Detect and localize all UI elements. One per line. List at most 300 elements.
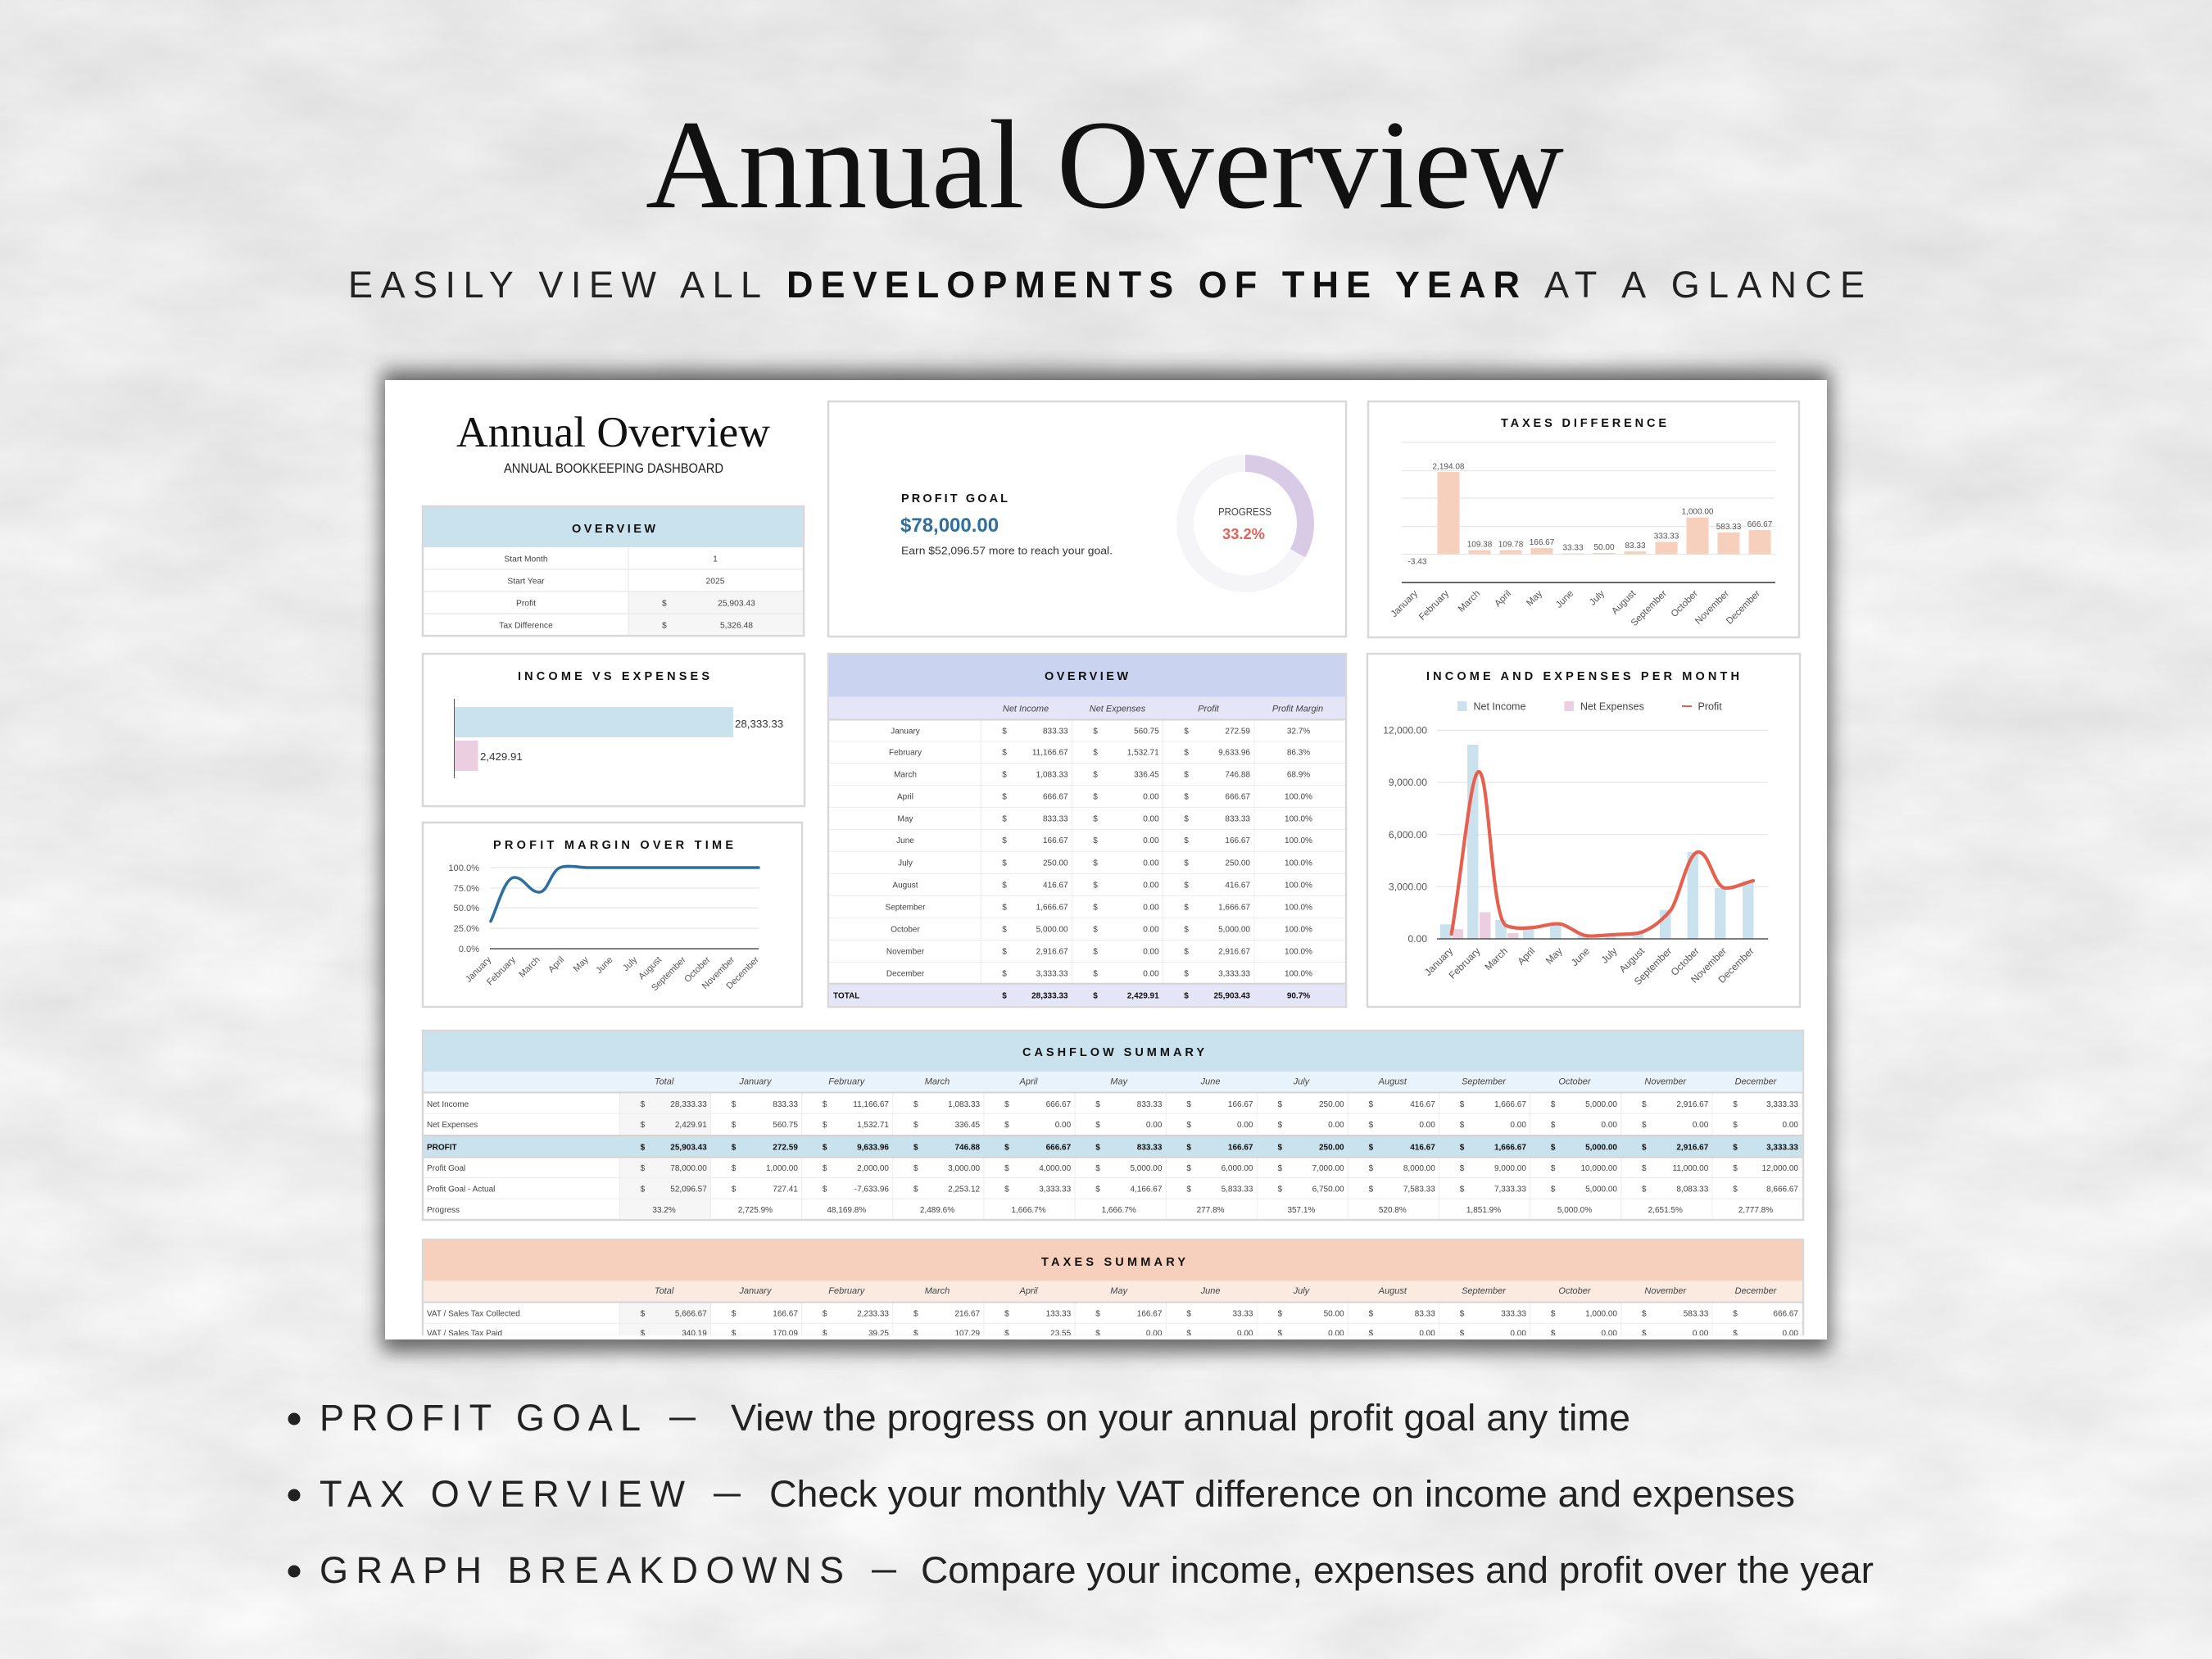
panel: monthly overview table: 336.45: [1134, 771, 1159, 780]
bar: income: [455, 707, 733, 737]
panel: profit margin over time: June: [594, 955, 615, 976]
row: net income: 11,166.67: [853, 1100, 889, 1109]
panel: monthly overview table: 1,083.33: [1036, 771, 1068, 780]
row: profit goal: 3,000.00: [948, 1164, 981, 1173]
panel: monthly overview table: [828, 654, 1346, 1007]
panel: monthly overview table: 0.00: [1143, 903, 1159, 912]
row: net expenses: 0.00: [1419, 1121, 1435, 1130]
panel: monthly overview table: $$$: [1002, 903, 1189, 912]
panel: taxes difference: 33.33: [1562, 544, 1584, 552]
panel: monthly overview table: October: [891, 926, 920, 935]
panel: monthly overview table: 0.00: [1143, 969, 1159, 978]
row: VAT collected: 166.67: [773, 1309, 798, 1319]
panel: taxes summary: July: [1293, 1286, 1311, 1296]
row: profit: 166.67: [1228, 1144, 1253, 1152]
panel: taxes summary: TAXES SUMMARY: [1041, 1256, 1185, 1269]
panel: monthly overview table: Profit: [1198, 705, 1220, 714]
panel: profit margin over time: September: [650, 954, 688, 993]
panel: cashflow summary: July: [1293, 1077, 1311, 1086]
row: net income: 1,083.33: [948, 1100, 981, 1109]
panel: monthly overview table: 166.67: [1225, 836, 1250, 845]
row: net expenses: 0.00: [1328, 1121, 1344, 1130]
panel: income and expenses per month: November: [1688, 945, 1729, 986]
panel: monthly overview table: 833.33: [1043, 814, 1068, 823]
row: progress: [427, 1206, 1773, 1215]
row: net expenses: 0.00: [1510, 1121, 1526, 1130]
panel: monthly overview table: 2,429.91: [1127, 991, 1159, 1000]
row: net income: 833.33: [773, 1100, 798, 1109]
panel: monthly overview table: 666.67: [1043, 793, 1068, 801]
panel: income and expenses per month: October: [1669, 945, 1702, 978]
panel: monthly overview table: 0.00: [1143, 926, 1159, 935]
panel: overview summary: 5,326.48: [720, 621, 753, 631]
panel: profit margin over time: August: [637, 955, 664, 981]
row: VAT paid (cut off): 340.19: [682, 1329, 707, 1339]
panel: monthly overview table: 100.0%: [1285, 859, 1312, 868]
row: net expenses: 2,429.91: [675, 1121, 707, 1130]
row: VAT paid (cut off): $$$$$$$$$$$$$: [641, 1329, 1738, 1339]
row: progress: 48,169.8%: [827, 1206, 866, 1215]
row: net expenses: 0.00: [1602, 1121, 1617, 1130]
panel: taxes difference: 583.33: [1716, 523, 1742, 532]
panel: monthly overview table: January: [891, 727, 920, 736]
row: net income: 666.67: [1046, 1100, 1072, 1109]
row: profit goal minus actual: 8,083.33: [1676, 1185, 1709, 1194]
panel: income and expenses per month: July: [1599, 945, 1620, 966]
panel: taxes summary: June: [1200, 1286, 1221, 1296]
row: VAT collected: 216.67: [955, 1309, 981, 1319]
row: net income: 5,000.00: [1585, 1100, 1617, 1109]
panel: monthly overview table: 86.3%: [1287, 748, 1310, 757]
row: VAT collected: 2,233.33: [857, 1309, 889, 1319]
panel: cashflow summary: January: [738, 1077, 773, 1086]
panel: taxes summary: Total: [655, 1286, 674, 1296]
panel: taxes difference: 2,194.08: [1433, 462, 1465, 472]
panel: monthly overview table: 100.0%: [1285, 926, 1312, 935]
subtitle: EASILY VIEW ALL: [348, 264, 761, 306]
row: VAT collected: VAT / Sales Tax Collected: [427, 1309, 520, 1319]
panel: profit goal: $78,000.00: [900, 514, 999, 537]
panel: monthly overview table: OVERVIEW: [1045, 670, 1128, 683]
row: VAT paid (cut off): 0.00: [1237, 1329, 1253, 1339]
panel: monthly overview table: 0.00: [1143, 793, 1159, 801]
row: VAT collected: 666.67: [1773, 1309, 1798, 1319]
panel: taxes summary: September: [1462, 1286, 1507, 1296]
row: profit goal: 5,000.00: [1130, 1164, 1163, 1173]
row: profit: 833.33: [1137, 1144, 1163, 1152]
panel: monthly overview table: $$$: [1002, 727, 1189, 736]
panel: monthly overview table: 5,000.00: [1036, 926, 1068, 935]
panel: income vs expenses: 2,429.91: [480, 750, 523, 763]
panel: profit margin over time: PROFIT MARGIN OVER TIME: [493, 839, 733, 852]
row: profit goal minus actual: Profit Goal - Actual: [427, 1185, 495, 1194]
row: profit: 9,633.96: [857, 1144, 889, 1152]
panel: profit margin over time: [423, 823, 802, 1007]
panel: monthly overview table: 0.00: [1143, 814, 1159, 823]
panel: cashflow summary: [423, 1031, 1803, 1220]
panel: monthly overview table: 833.33: [1225, 814, 1250, 823]
row: VAT collected: 33.33: [1232, 1309, 1253, 1319]
row: net expenses: 0.00: [1693, 1121, 1709, 1130]
panel: taxes summary: February: [828, 1286, 866, 1296]
row: VAT collected: 83.33: [1415, 1309, 1435, 1319]
row: profit: 5,000.00: [1585, 1144, 1617, 1152]
panel: taxes summary: January: [738, 1286, 773, 1296]
panel: taxes difference: April: [1493, 589, 1513, 609]
row: progress: 1,666.7%: [1102, 1206, 1136, 1215]
panel: monthly overview table: 250.00: [1225, 859, 1250, 868]
panel: taxes summary: April: [1018, 1286, 1038, 1296]
panel: monthly overview table: March: [894, 771, 917, 780]
row: progress: 1,851.9%: [1466, 1206, 1501, 1215]
panel: overview summary: 2025: [706, 577, 725, 587]
row: net income: $$$$$$$$$$$$$: [641, 1100, 1738, 1109]
panel: taxes difference: 109.38: [1467, 541, 1493, 549]
row: profit goal: 78,000.00: [670, 1164, 707, 1173]
panel: taxes difference: March: [1457, 589, 1482, 614]
panel: monthly overview table: 833.33: [1043, 727, 1068, 736]
row: VAT collected: 50.00: [1324, 1309, 1344, 1319]
panel: overview summary: OVERVIEW: [572, 523, 655, 536]
row: net income: 2,916.67: [1676, 1100, 1709, 1109]
panel: profit margin over time: November: [700, 954, 737, 991]
panel: monthly overview table: Profit Margin: [1272, 705, 1323, 714]
row: profit goal: 7,000.00: [1312, 1164, 1344, 1173]
panel: taxes difference: 666.67: [1747, 520, 1773, 529]
panel: income and expenses per month: September: [1632, 945, 1674, 987]
panel: monthly overview table: 746.88: [1225, 771, 1250, 780]
panel: monthly overview table: 28,333.33: [1031, 991, 1068, 1000]
bullet: profit goal: PROFIT GOAL: [320, 1397, 641, 1439]
panel: monthly overview table: 100.0%: [1285, 882, 1312, 890]
subtitle: AT A GLANCE: [1544, 264, 1865, 306]
panel: monthly overview table: Net Income: [1003, 705, 1049, 714]
panel: taxes difference: 333.33: [1654, 533, 1679, 541]
panel: monthly overview table: Net Expenses: [1090, 705, 1146, 714]
panel: monthly overview table: $$$: [1002, 926, 1189, 935]
panel: profit margin over time: December: [724, 954, 761, 991]
panel: monthly overview table: 3,333.33: [1218, 969, 1250, 978]
panel: monthly overview table: $$$: [1002, 771, 1189, 780]
panel: income and expenses per month: May: [1543, 945, 1565, 967]
panel: profit margin over time: March: [517, 955, 542, 980]
donut: progress: [1185, 464, 1306, 583]
panel: income vs expenses: INCOME VS EXPENSES: [518, 670, 709, 683]
row: net expenses: 0.00: [1783, 1121, 1798, 1130]
panel: profit goal: [828, 401, 1346, 637]
row: net income: Net Income: [427, 1100, 469, 1109]
row: net income: 28,333.33: [670, 1100, 707, 1109]
panel: profit margin over time: April: [546, 955, 566, 975]
panel: overview summary: Profit: [516, 600, 536, 608]
row: VAT paid (cut off): 170.09: [773, 1329, 798, 1339]
panel: monthly overview table: February: [889, 748, 922, 757]
panel: cashflow summary: October: [1558, 1077, 1592, 1086]
panel: overview summary: $: [662, 600, 667, 608]
row: net expenses: 560.75: [773, 1121, 798, 1130]
subtitle: DEVELOPMENTS OF THE YEAR: [786, 264, 1520, 306]
row: progress: 357.1%: [1287, 1206, 1315, 1215]
panel: taxes difference: 166.67: [1530, 538, 1555, 547]
panel: monthly overview table: $$$: [1002, 814, 1189, 823]
row: profit goal: 4,000.00: [1039, 1164, 1072, 1173]
panel: taxes summary: [423, 1240, 1803, 1339]
panel: overview summary: $: [662, 621, 667, 631]
panel: taxes difference: July: [1588, 588, 1607, 608]
panel: cashflow summary: May: [1110, 1077, 1129, 1086]
bars: net expenses: [1452, 913, 1519, 939]
panel: monthly overview table: $$$: [1002, 748, 1189, 757]
donut: progress: 33.2%: [1222, 525, 1265, 542]
panel: monthly overview table: 5,000.00: [1218, 926, 1250, 935]
row: profit goal: $$$$$$$$$$$$$: [641, 1164, 1738, 1173]
row: net expenses: 0.00: [1055, 1121, 1072, 1130]
panel: income and expenses per month: June: [1569, 945, 1592, 968]
panel: taxes summary: October: [1558, 1286, 1592, 1296]
panel: cashflow summary: April: [1018, 1077, 1038, 1086]
bullet: tax overview: Check your monthly VAT difference on income and expenses: [769, 1473, 1795, 1515]
panel: taxes summary: November: [1644, 1286, 1688, 1296]
panel: taxes summary: March: [925, 1286, 950, 1296]
row: profit goal: 12,000.00: [1761, 1164, 1798, 1173]
panel: monthly overview table: 416.67: [1043, 882, 1068, 890]
panel: income and expenses per month: March: [1482, 945, 1510, 972]
panel: profit margin over time: May: [572, 954, 591, 974]
row: progress: 2,777.8%: [1738, 1206, 1773, 1215]
row: net income: 833.33: [1137, 1100, 1163, 1109]
row: profit goal: Profit Goal: [427, 1164, 465, 1173]
panel: taxes summary: May: [1110, 1286, 1129, 1296]
row: VAT paid (cut off): 0.00: [1146, 1329, 1163, 1339]
panel: income and expenses per month: April: [1515, 945, 1537, 968]
row: net expenses: $$$$$$$$$$$$$: [641, 1121, 1738, 1130]
panel: monthly overview table: 100.0%: [1285, 947, 1312, 957]
panel: monthly overview table: 1,666.67: [1036, 903, 1068, 912]
legend: Net Expenses: [1580, 701, 1644, 713]
panel: monthly overview table: December: [886, 969, 925, 978]
row: net expenses: Net Expenses: [427, 1121, 478, 1130]
line: profit: [1452, 772, 1753, 936]
row: profit: 272.59: [773, 1144, 798, 1152]
row: VAT paid (cut off): 23.55: [1050, 1329, 1072, 1339]
panel: income and expenses per month: 9,000.00: [1389, 777, 1427, 788]
row: profit goal: 6,000.00: [1222, 1164, 1253, 1173]
panel: monthly overview table: 32.7%: [1287, 727, 1310, 736]
row: profit goal minus actual: 7,333.33: [1494, 1185, 1526, 1194]
panel: taxes difference: October: [1670, 589, 1700, 619]
panel: taxes difference: August: [1610, 588, 1639, 616]
bullet: tax overview: TAX OVERVIEW: [320, 1473, 686, 1515]
row: profit goal minus actual: 2,253.12: [948, 1185, 981, 1194]
panel: income and expenses per month: February: [1447, 945, 1483, 981]
panel: taxes difference: June: [1554, 589, 1575, 610]
panel: profit margin over time: February: [485, 954, 518, 987]
panel: monthly overview table: 166.67: [1043, 836, 1068, 845]
row: net expenses: 0.00: [1237, 1121, 1253, 1130]
panel: monthly overview table: 100.0%: [1285, 793, 1312, 801]
title: Annual Overview: [646, 94, 1564, 235]
row: profit goal: 8,000.00: [1403, 1164, 1435, 1173]
bullet: graph breakdowns: Compare your income, expenses and profit over the year: [921, 1549, 1874, 1591]
panel: profit margin over time: January: [464, 954, 493, 985]
panel: cashflow summary: November: [1644, 1077, 1688, 1086]
row: profit goal: 2,000.00: [857, 1164, 889, 1173]
panel: profit goal: PROFIT GOAL: [901, 492, 1008, 505]
panel: monthly overview table: August: [892, 882, 918, 890]
panel: monthly overview table: 100.0%: [1285, 814, 1312, 823]
panel: cashflow summary: August: [1378, 1077, 1407, 1086]
panel: profit margin over time: 100.0%: [448, 863, 479, 873]
panel: monthly overview table: June: [896, 836, 914, 845]
panel: monthly overview table: 1,532.71: [1127, 748, 1159, 757]
legend: Net Income: [1473, 701, 1525, 713]
row: progress: 520.8%: [1379, 1206, 1407, 1215]
row: profit goal minus actual: 6,750.00: [1312, 1185, 1344, 1194]
row: profit goal minus actual: 727.41: [773, 1185, 798, 1194]
panel: taxes difference: September: [1630, 589, 1669, 628]
row: profit: 250.00: [1319, 1144, 1344, 1152]
panel: cashflow summary: CASHFLOW SUMMARY: [1022, 1046, 1204, 1059]
row: VAT paid (cut off): VAT / Sales Tax Paid: [427, 1329, 502, 1339]
line: profit margin: [491, 866, 759, 921]
donut: progress: PROGRESS: [1218, 505, 1271, 518]
panel: profit margin over time: 50.0%: [454, 904, 479, 913]
panel: income and expenses per month: August: [1617, 945, 1647, 975]
row: progress: 2,489.6%: [920, 1206, 954, 1215]
row: progress: 5,000.0%: [1557, 1206, 1592, 1215]
panel: income and expenses per month: [1367, 654, 1800, 1007]
row: profit goal minus actual: 5,000.00: [1585, 1185, 1617, 1194]
panel: taxes difference: November: [1693, 589, 1731, 627]
panel: monthly overview table: $$$: [1002, 836, 1189, 845]
panel: monthly overview table: TOTAL: [833, 991, 859, 1000]
row: profit: 3,333.33: [1766, 1144, 1798, 1152]
row: net income: 3,333.33: [1766, 1100, 1798, 1109]
row: profit goal minus actual: 3,333.33: [1039, 1185, 1072, 1194]
bars: net income: [1440, 745, 1753, 939]
panel: monthly overview table: 25,903.43: [1214, 991, 1250, 1000]
panel: cashflow summary: February: [828, 1077, 866, 1086]
panel: monthly overview table: 666.67: [1225, 793, 1250, 801]
panel: taxes difference: 50.00: [1593, 543, 1615, 552]
panel: monthly overview table: 68.9%: [1287, 771, 1310, 780]
panel: monthly overview table: 2,916.67: [1218, 947, 1250, 957]
panel: income vs expenses: [423, 654, 805, 806]
legend: Profit: [1698, 701, 1722, 713]
panel: income vs expenses: 28,333.33: [735, 718, 783, 730]
row: net income: 416.67: [1410, 1100, 1435, 1109]
panel: monthly overview table: 100.0%: [1285, 836, 1312, 845]
panel: monthly overview table: July: [898, 859, 913, 868]
panel: income and expenses per month: 6,000.00: [1389, 829, 1427, 841]
row: progress: 2,651.5%: [1648, 1206, 1683, 1215]
panel: monthly overview table: $$$: [1002, 859, 1189, 868]
row: profit: 746.88: [955, 1144, 981, 1152]
bullet: graph breakdowns: GRAPH BREAKDOWNS: [320, 1549, 844, 1591]
bullet: profit goal: [288, 1397, 1630, 1439]
row: profit goal: 1,000.00: [766, 1164, 798, 1173]
row: net expenses: 0.00: [1146, 1121, 1163, 1130]
panel: cashflow summary: March: [925, 1077, 950, 1086]
panel: taxes summary: December: [1735, 1286, 1778, 1296]
row: progress: Progress: [427, 1206, 460, 1215]
row: profit goal minus actual: 7,583.33: [1403, 1185, 1435, 1194]
panel: income and expenses per month: 3,000.00: [1389, 882, 1427, 893]
panel: overview summary: Start Month: [504, 555, 548, 564]
row: VAT paid (cut off): 0.00: [1510, 1329, 1526, 1339]
bullet: graph breakdowns: [288, 1549, 1874, 1591]
row: progress: 2,725.9%: [738, 1206, 773, 1215]
row: VAT paid (cut off): 0.00: [1419, 1329, 1435, 1339]
panel: profit margin over time: 75.0%: [454, 884, 479, 894]
row: VAT paid (cut off): 0.00: [1602, 1329, 1617, 1339]
row: VAT paid (cut off): 0.00: [1783, 1329, 1798, 1339]
panel: overview summary: Tax Difference: [499, 621, 553, 631]
card shadow: [382, 370, 1830, 1352]
panel: income and expenses per month: 0.00: [1407, 933, 1427, 945]
row: profit: 416.67: [1410, 1144, 1435, 1152]
panel: monthly overview table: May: [898, 814, 913, 823]
row: VAT paid (cut off): 39.25: [868, 1329, 889, 1339]
panel: taxes difference: -3.43: [1408, 557, 1427, 567]
row: progress: 277.8%: [1197, 1206, 1225, 1215]
panel: overview summary: 25,903.43: [718, 600, 755, 608]
panel: income and expenses per month: January: [1422, 945, 1455, 978]
row: net income: 166.67: [1228, 1100, 1253, 1109]
row: VAT collected: 5,666.67: [675, 1309, 707, 1319]
panel: monthly overview table: 100.0%: [1285, 903, 1312, 912]
panel: profit margin over time: 0.0%: [459, 945, 479, 954]
panel: monthly overview table: 272.59: [1225, 727, 1250, 736]
panel: profit margin over time: 25.0%: [454, 924, 479, 934]
subtitle: [348, 264, 1865, 306]
panel: monthly overview table: September: [886, 903, 926, 912]
panel: taxes summary: August: [1378, 1286, 1407, 1296]
panel: profit goal: Earn $52,096.57 more to reach your goal.: [901, 544, 1113, 557]
panel: cashflow summary: December: [1735, 1077, 1778, 1086]
panel: monthly overview table: 2,916.67: [1036, 947, 1068, 957]
panel: taxes difference: TAXES DIFFERENCE: [1501, 417, 1666, 430]
dashboard title: [456, 409, 771, 476]
panel: monthly overview table: 0.00: [1143, 947, 1159, 957]
row: profit goal: 9,000.00: [1494, 1164, 1526, 1173]
row: net expenses: 336.45: [955, 1121, 981, 1130]
row: VAT paid (cut off): 0.00: [1328, 1329, 1344, 1339]
panel: income and expenses per month: December: [1716, 945, 1756, 986]
panel: monthly overview table: November: [886, 947, 925, 957]
row: VAT collected: 166.67: [1137, 1309, 1163, 1319]
panel: monthly overview table: 11,166.67: [1032, 748, 1068, 757]
dashboard card: [385, 380, 1827, 1339]
row: progress: 1,666.7%: [1011, 1206, 1046, 1215]
panel: monthly overview table: $$$: [1002, 947, 1189, 957]
row: net income: 1,666.67: [1494, 1100, 1526, 1109]
panel: monthly overview table: 100.0%: [1285, 969, 1312, 978]
panel: profit margin over time: October: [682, 954, 713, 985]
panel: cashflow summary: September: [1462, 1077, 1507, 1086]
panel: monthly overview table: 3,333.33: [1036, 969, 1068, 978]
panel: taxes difference: 109.78: [1498, 541, 1524, 549]
panel: monthly overview table: 1,666.67: [1218, 903, 1250, 912]
panel: monthly overview table: $$$: [1002, 969, 1189, 978]
row: profit goal: 11,000.00: [1673, 1164, 1709, 1173]
row: VAT collected: 1,000.00: [1585, 1309, 1617, 1319]
panel: overview summary: Start Year: [507, 577, 545, 587]
panel: overview summary: [423, 506, 804, 636]
row: profit goal: 10,000.00: [1581, 1164, 1617, 1173]
panel: taxes difference: December: [1725, 589, 1762, 627]
row: profit: 25,903.43: [670, 1144, 707, 1152]
